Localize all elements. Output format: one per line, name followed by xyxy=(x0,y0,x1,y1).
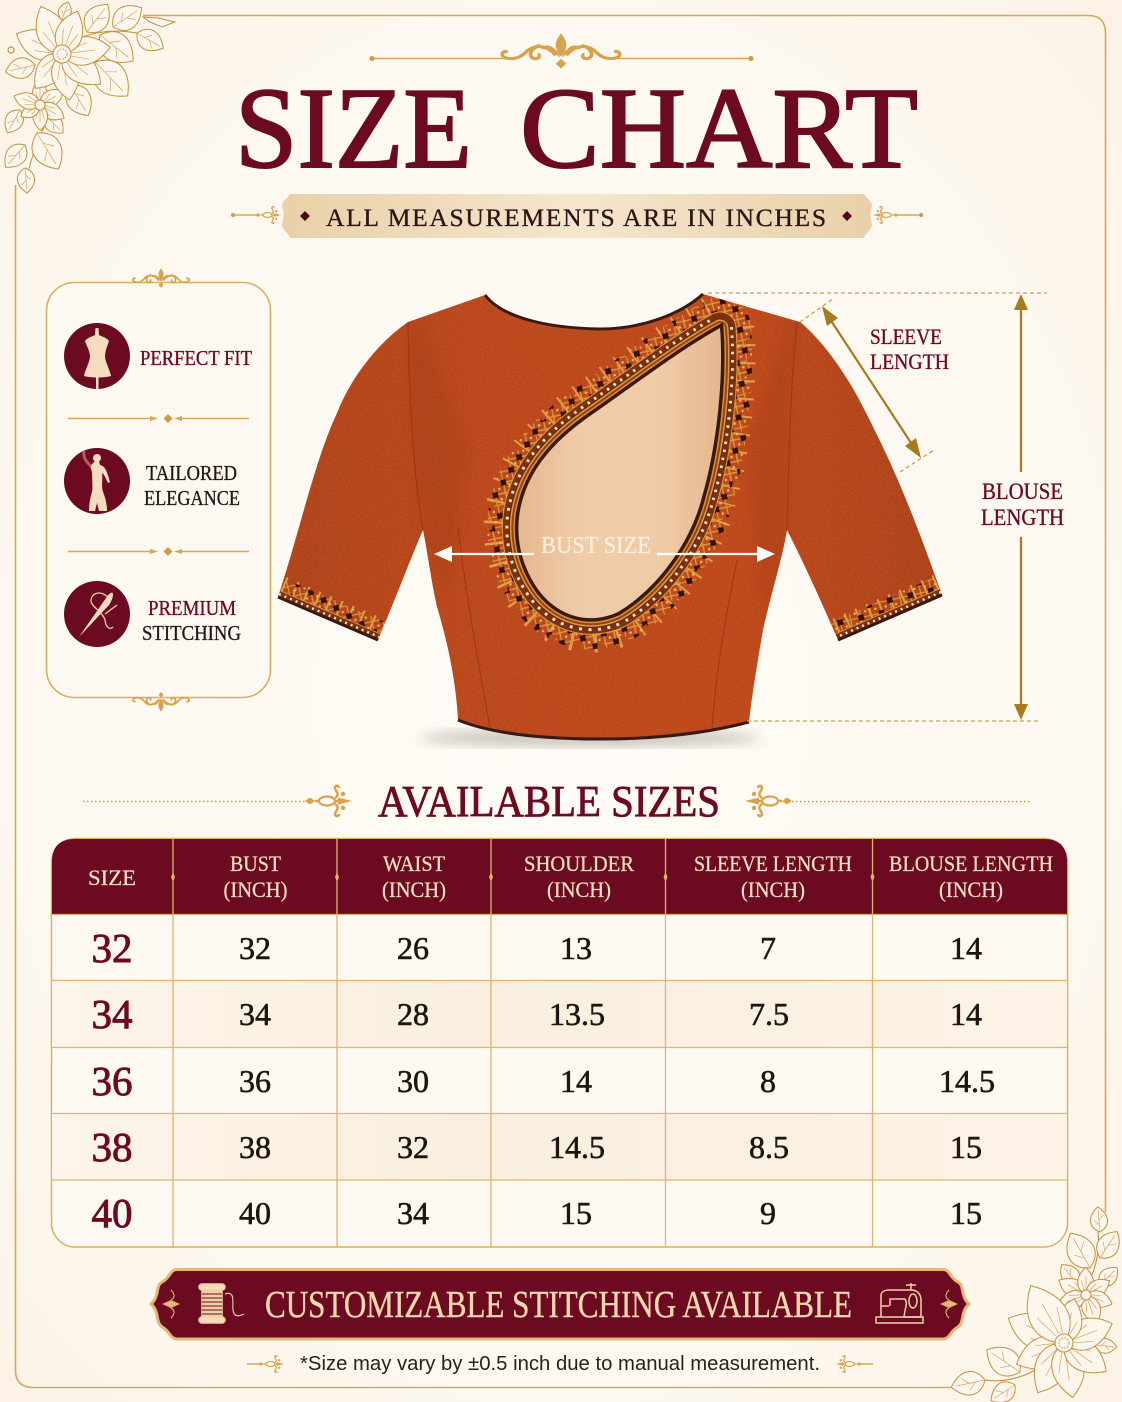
keyhole opening xyxy=(518,328,721,618)
row: size 40 xyxy=(92,1190,982,1236)
table header: (INCH) xyxy=(224,877,288,902)
icon: thread spool xyxy=(199,1284,244,1323)
table header: SLEEVE LENGTH xyxy=(694,851,852,876)
table header: SHOULDER xyxy=(524,851,634,876)
row: size 38: 8.5 xyxy=(749,1129,789,1165)
section heading: available sizes xyxy=(83,777,1030,826)
text: tailored elegance: ELEGANCE xyxy=(144,486,240,510)
top ornament xyxy=(370,33,754,69)
flourish: right xyxy=(873,207,923,223)
row: size 40: 34 xyxy=(397,1195,429,1231)
blouse length measure: LENGTH xyxy=(981,505,1064,530)
keyhole embroidery xyxy=(518,328,721,618)
row: size 32: 32 xyxy=(92,925,132,971)
table header: (INCH) xyxy=(382,877,446,902)
row: size 36: 14.5 xyxy=(939,1063,995,1099)
row: size 40: 9 xyxy=(760,1195,776,1231)
row: size 38: 38 xyxy=(92,1124,132,1170)
row: size 34: 34 xyxy=(92,991,132,1037)
blouse body xyxy=(278,294,942,739)
blouse length measure xyxy=(708,293,1064,721)
sleeve length measure xyxy=(800,298,949,472)
table header: (INCH) xyxy=(939,877,1003,902)
panel: benefits xyxy=(46,268,270,712)
row: size 40: 40 xyxy=(92,1190,132,1236)
footnote: *Size may vary by ±0.5 inch due to manual measurement. xyxy=(300,1353,820,1375)
table header: BLOUSE LENGTH xyxy=(889,851,1053,876)
row: size 32: 7 xyxy=(760,930,776,966)
table header xyxy=(52,839,1067,914)
text: premium stitching xyxy=(142,596,241,645)
icon: woman silhouette xyxy=(64,448,130,514)
row: size 36: 36 xyxy=(92,1058,132,1104)
table header: WAIST xyxy=(383,851,446,876)
blouse edge piping xyxy=(278,294,942,739)
title xyxy=(235,65,918,193)
bust size measure: BUST SIZE xyxy=(541,533,651,559)
banner: customizable stitching xyxy=(151,1270,969,1339)
row: size 32 xyxy=(92,925,982,971)
row: size 34: 34 xyxy=(239,996,271,1032)
row: size 32: 26 xyxy=(397,930,429,966)
blouse length measure: BLOUSE xyxy=(982,479,1063,504)
table header: (INCH) xyxy=(741,877,805,902)
text: perfect fit: PERFECT FIT xyxy=(140,346,252,370)
text: premium stitching: PREMIUM xyxy=(148,596,236,620)
sleeve cuff embroidery xyxy=(279,587,941,637)
title: CHART xyxy=(520,65,918,193)
row: size 36: 36 xyxy=(239,1063,271,1099)
row: size 40: 40 xyxy=(239,1195,271,1231)
text: tailored elegance xyxy=(144,461,240,510)
icon: dress form xyxy=(64,323,130,389)
blouse illustration xyxy=(278,294,942,747)
flourish: left xyxy=(231,207,281,223)
bust size measure xyxy=(434,533,775,562)
row: size 36 xyxy=(92,1058,995,1104)
row: size 34: 7.5 xyxy=(749,996,789,1032)
floral corner: top left xyxy=(0,0,175,194)
table header: (INCH) xyxy=(547,877,611,902)
floral corner: bottom right xyxy=(949,1206,1122,1402)
title: SIZE xyxy=(235,65,472,193)
table header: SIZE xyxy=(88,865,136,890)
row: size 36: 30 xyxy=(397,1063,429,1099)
row: size 34: 14 xyxy=(950,996,982,1032)
text: banner label: CUSTOMIZABLE STITCHING AVAILABLE xyxy=(265,1284,852,1326)
table header: BUST xyxy=(230,851,281,876)
divider xyxy=(68,547,249,556)
size table xyxy=(52,838,1068,1247)
row: size 38: 38 xyxy=(239,1129,271,1165)
row: size 32: 13 xyxy=(560,930,592,966)
icon: sewing machine xyxy=(876,1283,923,1323)
divider xyxy=(68,414,249,423)
row: size 38 xyxy=(92,1124,982,1170)
ornament: panel top xyxy=(133,268,189,288)
flourish: right xyxy=(836,1356,873,1372)
sleeve length measure: LENGTH xyxy=(870,349,949,374)
icon: needle and thread xyxy=(64,581,130,647)
row: size 38: 15 xyxy=(950,1129,982,1165)
subtitle banner: ALL MEASUREMENTS ARE IN INCHES xyxy=(326,203,826,232)
row: size 36: 8 xyxy=(760,1063,776,1099)
row: size 32: 32 xyxy=(239,930,271,966)
sleeve length measure: SLEEVE xyxy=(870,324,942,349)
section heading: available sizes: AVAILABLE SIZES xyxy=(378,777,720,826)
text: premium stitching: STITCHING xyxy=(142,621,241,645)
flourish: left xyxy=(247,1356,284,1372)
row: size 32: 14 xyxy=(950,930,982,966)
row: size 38: 14.5 xyxy=(549,1129,605,1165)
row: size 34: 28 xyxy=(397,996,429,1032)
row: size 34: 13.5 xyxy=(549,996,605,1032)
subtitle banner xyxy=(231,194,923,238)
row: size 34 xyxy=(92,991,982,1037)
row: size 40: 15 xyxy=(950,1195,982,1231)
row: size 36: 14 xyxy=(560,1063,592,1099)
ornament: panel bottom xyxy=(133,692,189,712)
row: size 40: 15 xyxy=(560,1195,592,1231)
row: size 38: 32 xyxy=(397,1129,429,1165)
text: tailored elegance: TAILORED xyxy=(146,461,237,485)
